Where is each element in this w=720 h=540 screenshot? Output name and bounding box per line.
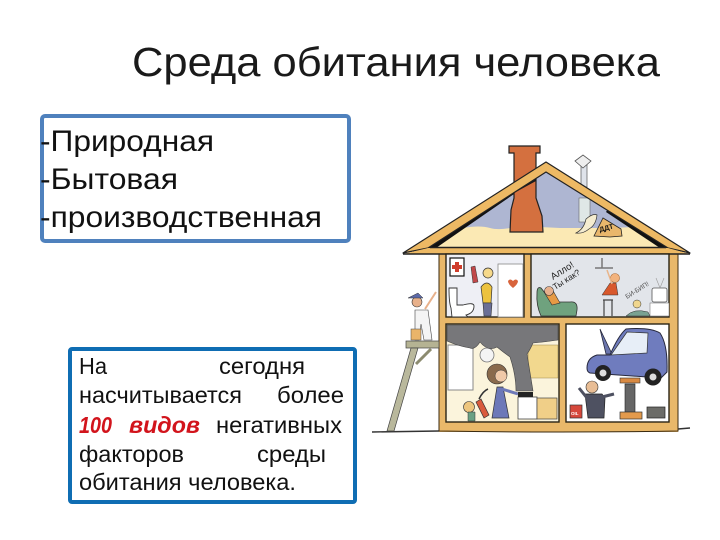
woman [487, 364, 507, 384]
callout text: видов [129, 412, 200, 438]
text: Бытовая: -Бытовая [40, 163, 178, 196]
icon: ДДТ box [594, 218, 622, 237]
car lift [620, 378, 640, 383]
attic [428, 172, 668, 248]
room: living room: БИ-БИП! [624, 281, 651, 301]
roof [403, 162, 690, 253]
TV and toddler [652, 288, 667, 302]
mechanic [586, 381, 598, 393]
callout text: обитания человека. [79, 469, 296, 495]
callout text: среды [257, 441, 326, 467]
callout text: негативных [216, 412, 342, 438]
text: производственная: -производственная [40, 201, 322, 234]
callout text: факторов [79, 441, 184, 467]
callout text: сегодня [219, 353, 305, 379]
house frame [439, 254, 678, 432]
car [587, 328, 667, 386]
painter on scaffold [387, 292, 439, 431]
smoke cloud [447, 325, 558, 391]
room: living room [531, 254, 669, 317]
lamp girl [595, 258, 613, 268]
callout text: насчитывается [79, 382, 242, 408]
speech text: Алло! [549, 260, 576, 283]
oil can: OIL [571, 411, 579, 416]
panel: negative factors callout [70, 349, 355, 502]
stove and cabinet [518, 397, 537, 419]
room: kitchen with smoke [446, 324, 559, 422]
callout text: более [277, 382, 344, 408]
panel: habitat types [40, 116, 349, 241]
child with extinguisher [464, 402, 474, 412]
ground line [372, 428, 690, 432]
icon: straw hat [576, 214, 597, 233]
callout text: 100 [79, 412, 112, 438]
room: garage with car [566, 324, 669, 422]
icon: chimney top and vent pipe [509, 146, 591, 187]
callout text: На [79, 353, 108, 379]
speech text: Ты как? [551, 267, 582, 292]
title: Среда обитания человека [132, 39, 660, 85]
icon: ДДТ box: ДДТ [599, 223, 615, 234]
callout text [79, 353, 344, 495]
rafter shadows [428, 191, 668, 248]
text: Природная: -Природная [40, 125, 214, 158]
illustration: house cross-section [372, 146, 690, 432]
person on armchair [537, 288, 577, 316]
car battery [647, 407, 665, 418]
room: bathroom [446, 254, 524, 317]
